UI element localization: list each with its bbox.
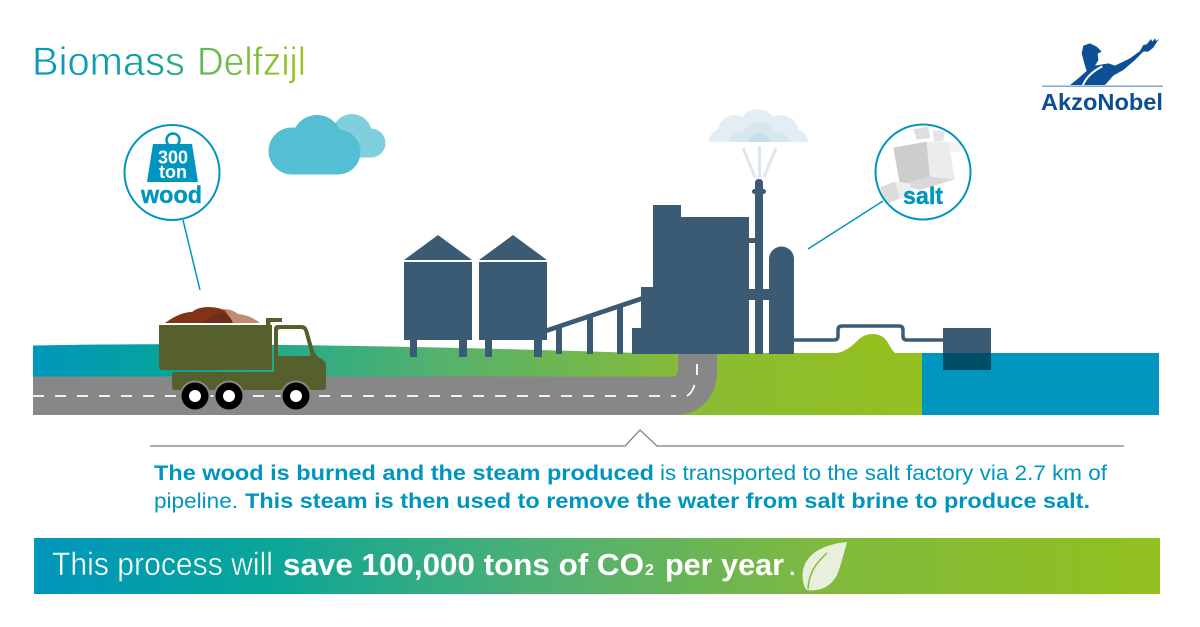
banner: save 100,000 tons of CO xyxy=(283,547,644,582)
icon: weight: 300 xyxy=(158,148,188,168)
icon: weight xyxy=(147,134,198,182)
title xyxy=(32,40,306,84)
banner: This process will xyxy=(52,546,273,582)
pipeline xyxy=(794,326,943,340)
callout: wood xyxy=(124,125,220,290)
AkzoNobel logo xyxy=(1041,38,1163,115)
bracket line xyxy=(150,430,1124,446)
steam cloud xyxy=(709,109,808,177)
chimney xyxy=(749,179,769,354)
wood load xyxy=(165,307,260,323)
banner: per year xyxy=(665,547,784,582)
silos xyxy=(404,235,547,357)
road xyxy=(33,353,717,415)
water xyxy=(922,353,1159,415)
conveyor xyxy=(547,296,642,354)
description text: The wood is burned and the steam produced xyxy=(154,462,654,485)
hill xyxy=(832,334,897,354)
tank xyxy=(769,246,794,354)
description text xyxy=(154,462,1107,513)
title: Delfzijl xyxy=(197,40,306,84)
description text: This steam is then used to remove the water from salt brine to produce salt. xyxy=(245,490,1090,513)
banner: . xyxy=(788,547,797,582)
description text: is transported to the salt factory via 2.7 km of xyxy=(660,462,1107,485)
banner xyxy=(34,538,1160,594)
callout: salt: salt xyxy=(903,183,943,210)
banner: 2 xyxy=(645,562,654,579)
AkzoNobel logo: AkzoNobel xyxy=(1041,89,1163,115)
icon: weight: ton xyxy=(159,162,187,182)
truck xyxy=(159,307,326,412)
description text: pipeline. xyxy=(154,490,238,513)
factory building xyxy=(632,205,749,354)
title: Biomass xyxy=(32,40,185,84)
cloud: blue xyxy=(268,114,386,174)
outlet box xyxy=(943,328,991,370)
callout: salt xyxy=(808,124,970,249)
ground xyxy=(33,344,922,415)
callout: wood: wood xyxy=(140,182,202,209)
icon: leaf xyxy=(803,542,847,590)
